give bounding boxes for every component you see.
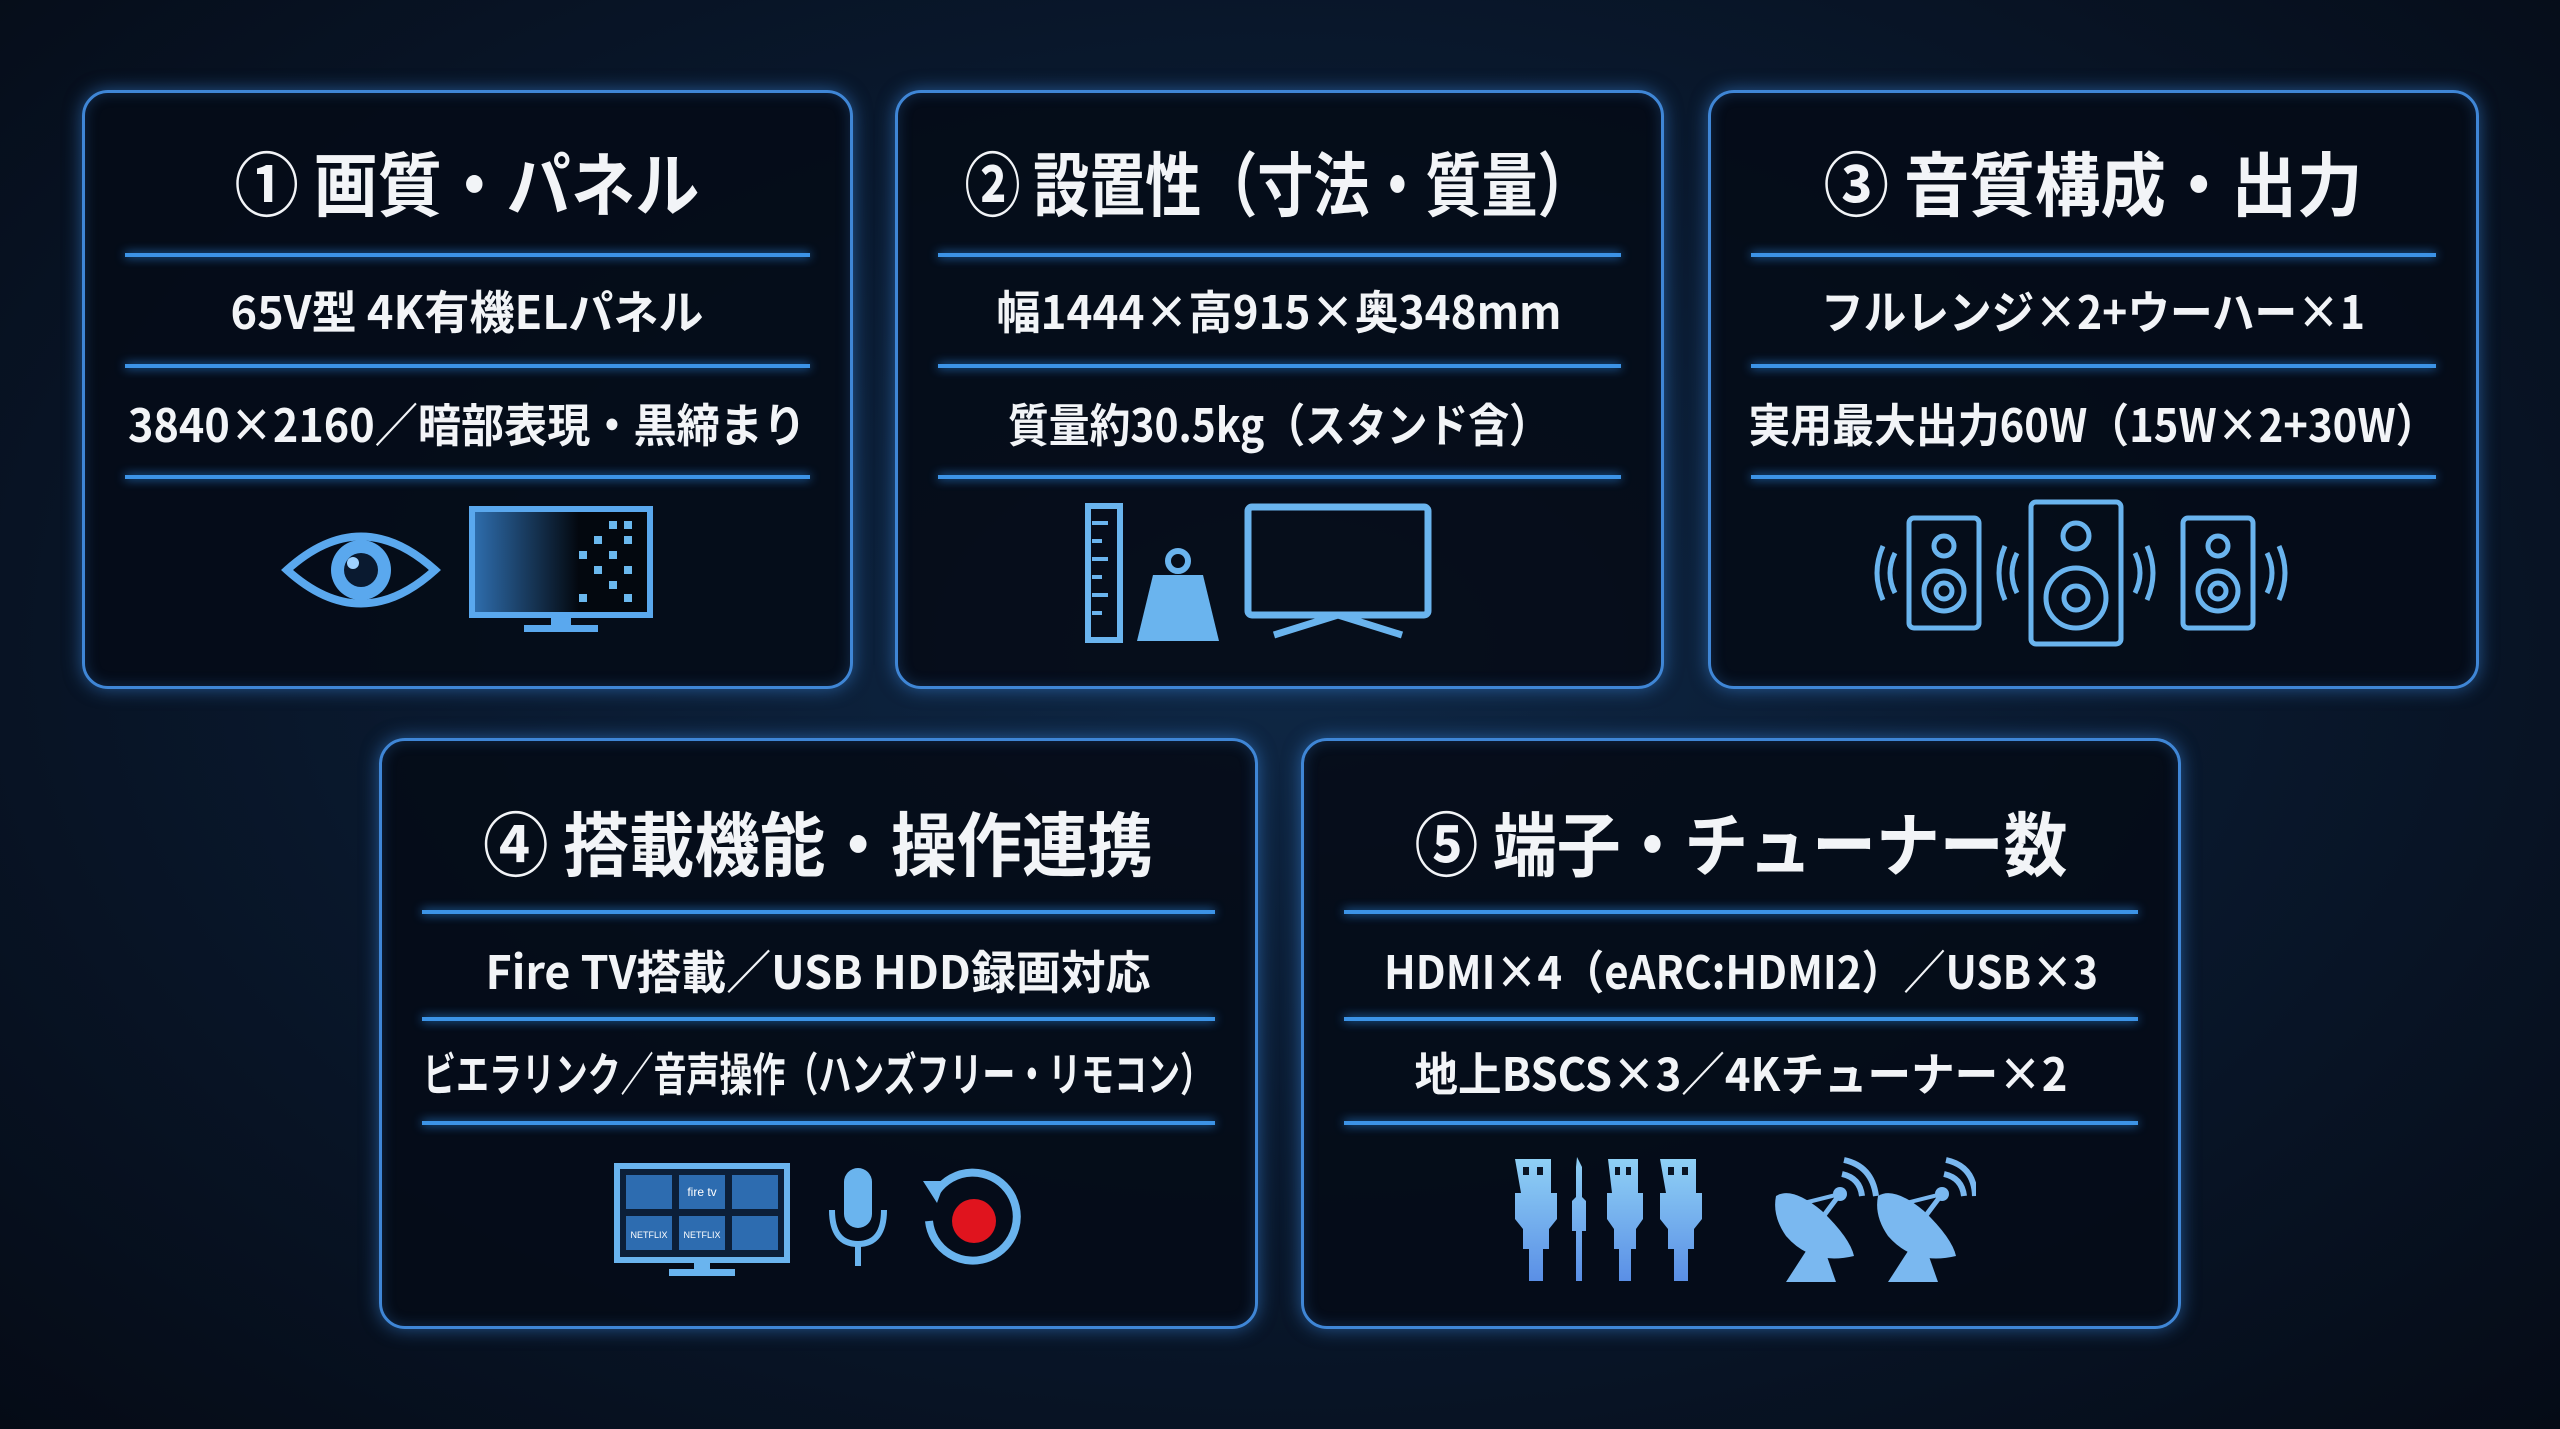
icon: ruler [1085, 503, 1123, 643]
text: tuners: 地上BSCS×3／4Kチューナー×2 [1414, 1039, 2068, 1105]
panel: installation [895, 90, 1664, 689]
heading: ① 画質・パネル [234, 130, 700, 232]
text: panel spec: 65V型 4K有機ELパネル [230, 277, 704, 343]
heading: ② 設置性（寸法・質量） [964, 130, 1594, 232]
text: output: 実用最大出力60W（15W×2+30W） [1748, 390, 2438, 456]
icon: fire tv screen: fire tv [687, 1185, 717, 1199]
icon: oled tv [469, 506, 653, 632]
text: link: ビエラリンク／音声操作（ハンズフリー・リモコン） [423, 1039, 1213, 1105]
text: weight: 質量約30.5kg（スタンド含） [1008, 390, 1550, 456]
icon: tv [1244, 504, 1432, 638]
text: speakers: フルレンジ×2+ウーハー×1 [1821, 277, 2365, 343]
panel: features [379, 738, 1258, 1329]
text: dimensions: 幅1444×高915×奥348mm [996, 277, 1562, 343]
icon: eye [281, 532, 441, 608]
heading: ④ 搭載機能・操作連携 [483, 790, 1153, 892]
icon: fire tv screen [614, 1163, 790, 1276]
text: hdmi: HDMI×4（eARC:HDMI2）／USB×3 [1384, 937, 2098, 1003]
panel: sound [1708, 90, 2479, 689]
icon: fire tv screen: NETFLIX [683, 1230, 721, 1240]
text: resolution: 3840×2160／暗部表現・黒締まり [128, 390, 806, 456]
icon: record [923, 1168, 1021, 1265]
heading: ⑤ 端子・チューナー数 [1414, 790, 2068, 892]
panel: image quality [82, 90, 853, 689]
icon: satellite dishes [1775, 1157, 1976, 1282]
icon: speakers [1874, 500, 2288, 646]
icon: connectors [1515, 1157, 1702, 1281]
icon: weight [1137, 548, 1219, 641]
panel: terminals [1301, 738, 2181, 1329]
text: fire tv: Fire TV搭載／USB HDD録画対応 [486, 937, 1150, 1003]
icon: fire tv screen: NETFLIX [630, 1230, 668, 1240]
heading: ③ 音質構成・出力 [1824, 130, 2362, 232]
icon: microphone [829, 1168, 887, 1266]
